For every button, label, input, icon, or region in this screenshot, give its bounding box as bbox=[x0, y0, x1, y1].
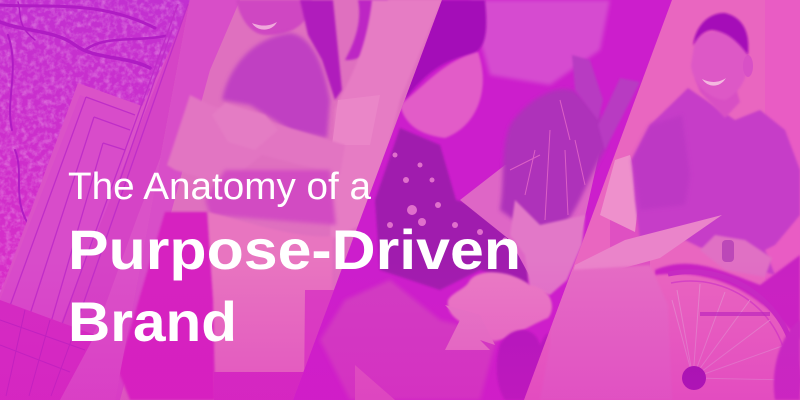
tree branches bbox=[0, 2, 165, 230]
man: neck bbox=[695, 78, 740, 118]
panel: trees and building bbox=[0, 0, 190, 400]
man: dark legs bbox=[655, 255, 800, 340]
celery stalks bbox=[572, 55, 640, 150]
leaves bbox=[320, 280, 500, 400]
light leaf highlights bbox=[445, 305, 495, 350]
embracing arm bbox=[166, 95, 344, 173]
panel: child with vegetables bbox=[290, 0, 680, 400]
woman one: smile bbox=[252, 22, 277, 30]
woman two: torso bbox=[330, 0, 442, 240]
panel: man in wheelchair bbox=[520, 0, 800, 400]
woman one: hair braid bbox=[300, 0, 342, 100]
building bbox=[0, 2, 190, 400]
purple eggplants bbox=[497, 330, 552, 400]
panel: two women embracing bbox=[90, 0, 445, 400]
title line one: The Anatomy of a bbox=[68, 166, 372, 208]
title line three: Brand bbox=[68, 290, 237, 353]
foreground dark shape bbox=[774, 320, 800, 400]
man: paper sheets bbox=[570, 215, 722, 283]
woman one: face bbox=[236, 0, 312, 35]
child face bbox=[400, 52, 483, 138]
man: ear bbox=[743, 55, 753, 77]
cauliflower bbox=[448, 272, 552, 341]
wheelchair wheel bbox=[668, 272, 797, 396]
dress pattern bbox=[387, 152, 508, 242]
woman two: top bbox=[332, 95, 380, 145]
woman one: dark arm bbox=[222, 33, 330, 138]
man: hair bbox=[693, 13, 748, 55]
patterned dress bbox=[375, 128, 530, 290]
tree foliage texture bbox=[0, 0, 190, 294]
adult shirt bbox=[470, 0, 610, 85]
floor shadow bbox=[304, 290, 334, 370]
shorts bbox=[208, 212, 332, 304]
woman two: hair bbox=[345, 0, 388, 60]
bottom tint bbox=[0, 260, 800, 400]
title line two: Purpose-Driven bbox=[68, 218, 521, 281]
man: rolled sleeve shadow bbox=[630, 120, 686, 206]
hand bbox=[222, 103, 270, 123]
lower leg bbox=[214, 372, 304, 400]
carrots stems bbox=[510, 100, 585, 220]
hands holding carrots bbox=[510, 200, 585, 295]
woman skirt bbox=[540, 265, 672, 400]
background person arm bbox=[600, 155, 640, 232]
carrot greens bbox=[500, 89, 607, 231]
waist bbox=[205, 170, 336, 225]
man: hand and watch bbox=[700, 235, 772, 277]
paper bag bbox=[460, 158, 598, 274]
man: shirt bbox=[632, 88, 800, 275]
wheel interior shade bbox=[700, 312, 770, 316]
child hair bbox=[404, 0, 486, 100]
title bbox=[68, 166, 521, 353]
left trousers bbox=[118, 212, 215, 400]
crate corner bbox=[355, 365, 395, 400]
man: face bbox=[691, 31, 748, 100]
man: smile bbox=[702, 78, 726, 86]
